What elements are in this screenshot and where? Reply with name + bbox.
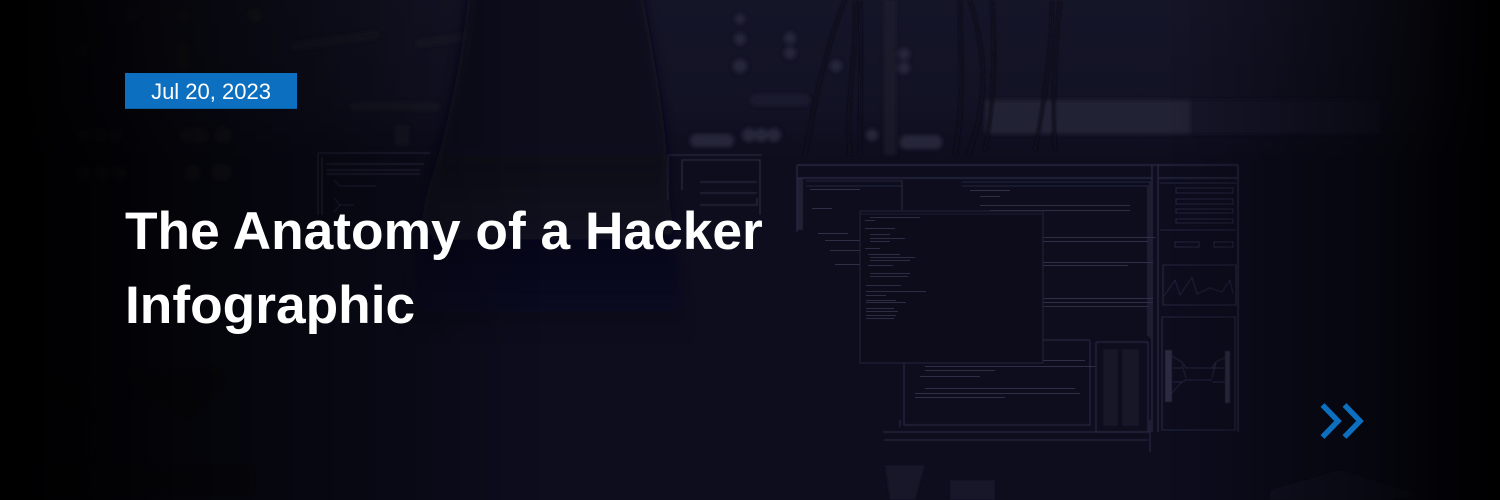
date badge: Jul 20, 2023 <box>151 79 271 104</box>
title: The Anatomy of a Hacker <box>125 202 763 261</box>
title <box>125 202 763 335</box>
title: Infographic <box>125 276 415 335</box>
icon: double chevron arrow <box>1320 403 1364 439</box>
date badge <box>125 73 297 109</box>
